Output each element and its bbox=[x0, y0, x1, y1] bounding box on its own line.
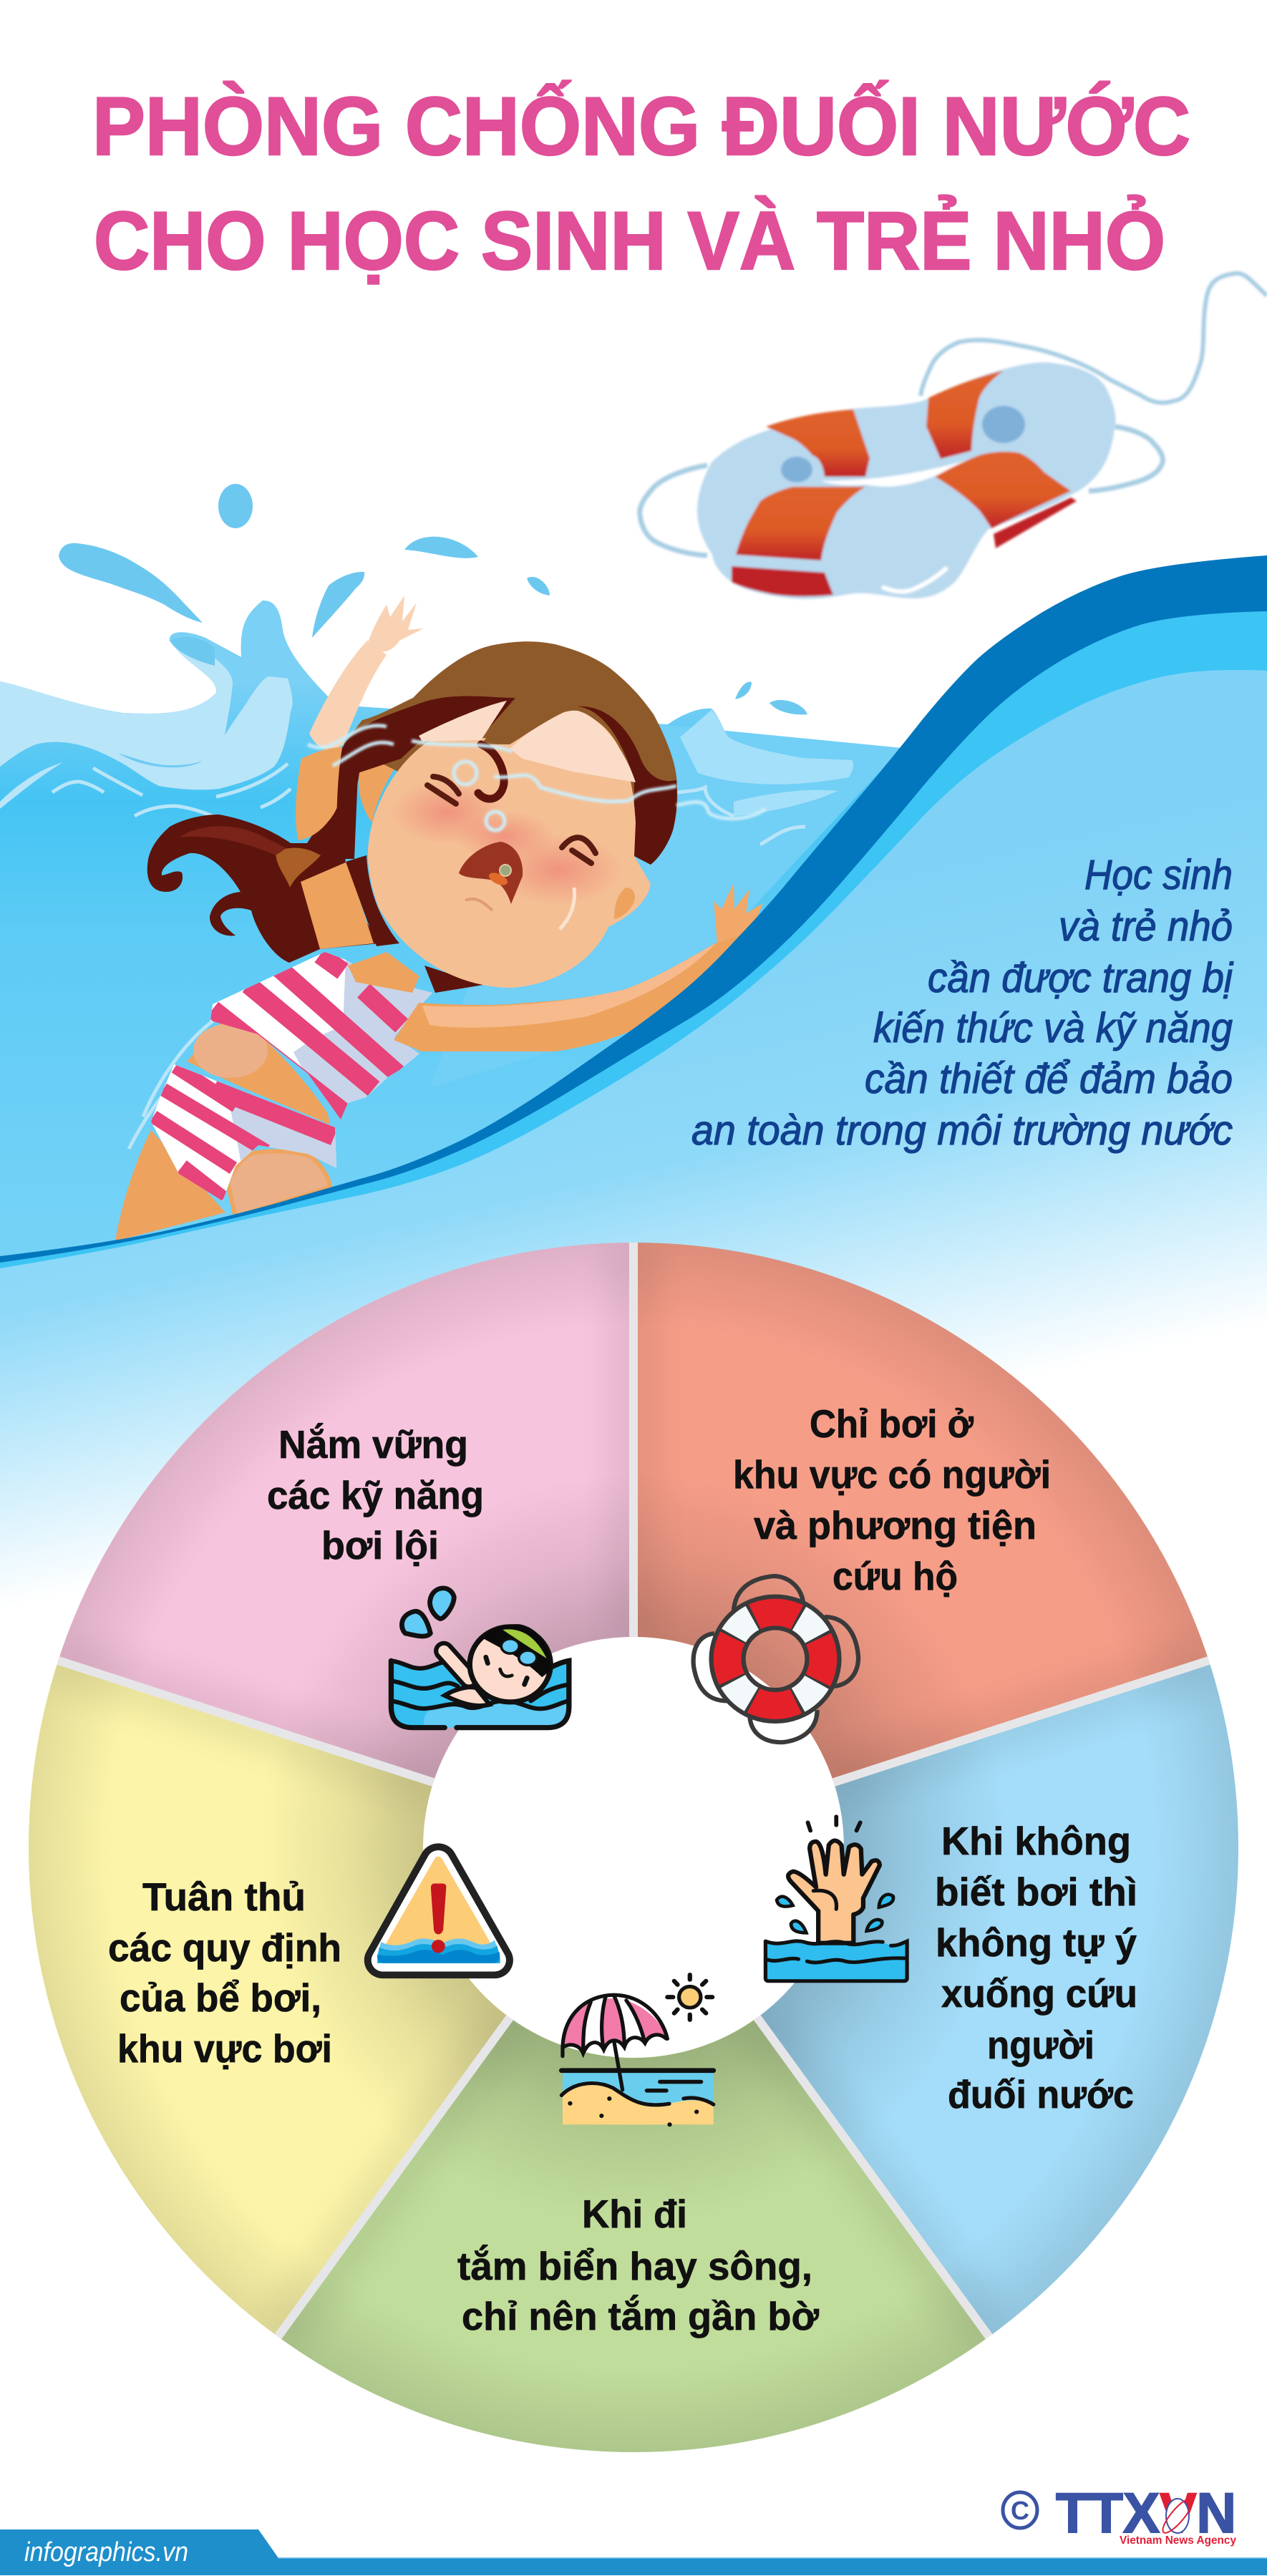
illustration: water and splash behind the girl bbox=[0, 484, 902, 1274]
belly bbox=[187, 1021, 330, 1124]
wave: dark blue band bbox=[0, 555, 1267, 1661]
footer tab and bar bbox=[0, 2529, 1267, 2575]
text: swimming skills: các kỹ năng bbox=[267, 1473, 484, 1517]
intro text: Học sinh bbox=[1084, 852, 1233, 898]
logo: copyright and TTXVN: C bbox=[1011, 2496, 1029, 2525]
hair back bbox=[344, 641, 677, 865]
text: swimming skills: Nắm vững bbox=[278, 1422, 468, 1467]
intro text bbox=[691, 852, 1234, 1154]
intro text: cần thiết để đảm bảo bbox=[865, 1056, 1233, 1102]
text: do not attempt rescue: người bbox=[987, 2023, 1094, 2067]
title: CHO HỌC SINH VÀ TRẺ NHỎ bbox=[94, 195, 1165, 287]
intro text: kiến thức và kỹ năng bbox=[873, 1005, 1233, 1051]
segment: blue bbox=[757, 1661, 1238, 2337]
text: do not attempt rescue: xuống cứu bbox=[941, 1971, 1137, 2016]
footer site name: infographics.vn bbox=[24, 2537, 188, 2567]
logo: copyright and TTXVN: TTXVN bbox=[1056, 2481, 1236, 2545]
intro text: và trẻ nhỏ bbox=[1059, 903, 1233, 950]
text: stay near the shore bbox=[457, 2192, 820, 2338]
right arm and hand bbox=[394, 883, 763, 1051]
text: follow pool rules: các quy định bbox=[108, 1925, 341, 1970]
blush bbox=[390, 780, 623, 905]
illustration: thrown lifebuoy with rope bbox=[640, 273, 1267, 599]
leg and thigh bbox=[115, 1130, 330, 1241]
icon: beach umbrella and sun bbox=[561, 1975, 714, 2127]
title bbox=[92, 81, 1190, 287]
intro text: cần được trang bị bbox=[928, 955, 1234, 1001]
eyes, curl and mouth bbox=[427, 744, 635, 929]
donut chart of five safety tips bbox=[28, 1242, 1239, 2453]
text: supervised swimming areas bbox=[733, 1401, 1051, 1598]
splash highlight bbox=[0, 641, 293, 789]
text: follow pool rules: của bể bơi, bbox=[120, 1975, 321, 2020]
background: lower blue wave bbox=[0, 670, 1267, 1661]
text: do not attempt rescue bbox=[935, 1819, 1137, 2116]
text: follow pool rules: Tuân thủ bbox=[142, 1875, 306, 1919]
illustration: drowning girl bbox=[115, 596, 766, 1241]
text: swimming skills bbox=[267, 1422, 484, 1568]
text: supervised swimming areas: Chỉ bơi ở bbox=[810, 1401, 974, 1446]
water drops bbox=[218, 484, 253, 528]
shoulder and dark hair under chin bbox=[348, 952, 483, 993]
right splash highlight bbox=[680, 710, 853, 784]
text: supervised swimming areas: khu vực có người bbox=[733, 1452, 1051, 1497]
swimsuit bottom bbox=[151, 1064, 336, 1201]
forehead highlights bbox=[419, 701, 636, 782]
icon: drowning hand bbox=[765, 1817, 907, 1981]
ring shading bbox=[28, 1242, 1239, 2453]
text: supervised swimming areas: cứu hộ bbox=[832, 1554, 958, 1598]
intro text: an toàn trong môi trường nước bbox=[691, 1107, 1233, 1154]
icon: warning triangle bbox=[377, 1860, 500, 1963]
hair tail bbox=[147, 744, 379, 963]
segment: salmon bbox=[634, 1243, 1209, 1782]
text: do not attempt rescue: biết bơi thì bbox=[935, 1870, 1137, 1914]
title: PHÒNG CHỐNG ĐUỐI NƯỚC bbox=[92, 81, 1190, 172]
text: stay near the shore: Khi đi bbox=[582, 2192, 687, 2236]
text: follow pool rules: khu vực bơi bbox=[117, 2026, 332, 2071]
text: do not attempt rescue: không tự ý bbox=[936, 1920, 1137, 1965]
icon: swimmer bbox=[391, 1588, 569, 1728]
text: swimming skills: bơi lội bbox=[321, 1523, 439, 1568]
text: follow pool rules bbox=[108, 1875, 341, 2071]
water lines over the face bbox=[308, 726, 766, 830]
wave: light blue band bbox=[0, 611, 1267, 1661]
text: do not attempt rescue: Khi không bbox=[941, 1819, 1131, 1863]
segment: pink bbox=[58, 1243, 634, 1782]
logo: copyright and TTXVN: Vietnam News Agency bbox=[1120, 2534, 1236, 2547]
swimsuit top bbox=[210, 952, 432, 1119]
left side hair bbox=[336, 696, 515, 859]
raised arm and hand bbox=[309, 596, 424, 749]
text: stay near the shore: chỉ nên tắm gần bờ bbox=[462, 2294, 820, 2338]
neck and lower arm bbox=[296, 747, 401, 949]
icon: life ring bbox=[694, 1576, 858, 1742]
text: supervised swimming areas: và phương tiện bbox=[754, 1503, 1037, 1547]
segment: yellow bbox=[29, 1661, 510, 2337]
face bbox=[368, 716, 651, 988]
text: stay near the shore: tắm biển hay sông, bbox=[457, 2244, 812, 2288]
text: do not attempt rescue: đuối nước bbox=[948, 2072, 1134, 2116]
segment: green bbox=[278, 2018, 989, 2452]
